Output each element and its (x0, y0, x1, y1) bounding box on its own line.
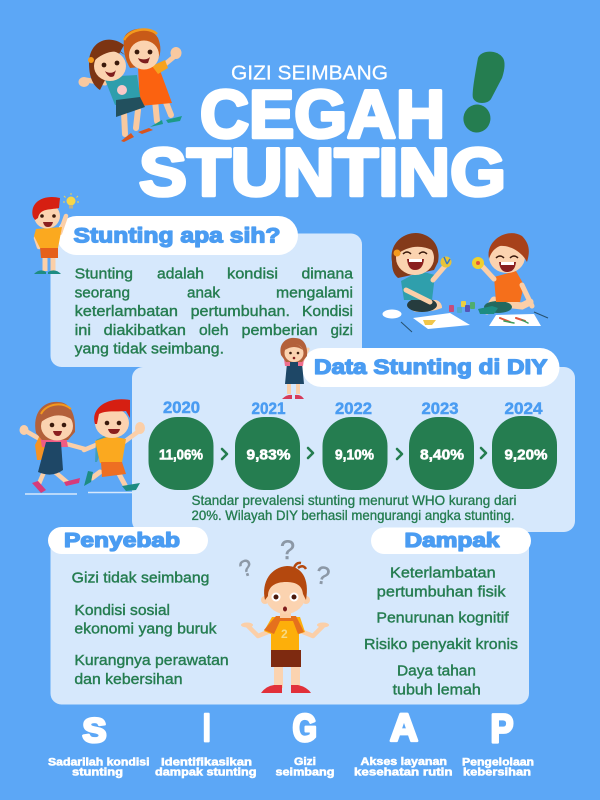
letter P: kebersihan (463, 767, 531, 779)
paragraph: kondisi (227, 266, 278, 283)
letter S (48, 712, 150, 779)
heading: dampak (371, 528, 531, 554)
footnote (192, 492, 516, 523)
letter A: Akses layanan (360, 756, 447, 768)
letter I (155, 707, 256, 779)
year 2024: 2024 (504, 400, 543, 418)
ground shadows (25, 492, 132, 494)
year 2020: 11,06% (159, 446, 203, 463)
illustration: confused boy: ? (236, 554, 256, 582)
letter S: stunting (72, 767, 123, 779)
panel: penyebab and dampak (48, 527, 531, 704)
year 2021 (235, 400, 300, 490)
list: penyebab: Gizi tidak seimbang (72, 570, 209, 586)
chevron (481, 448, 486, 458)
illustration: girl pointing (280, 338, 308, 399)
letter P (462, 707, 534, 779)
title (139, 76, 506, 210)
list: dampak: tubuh lemah (393, 681, 481, 698)
letter I: I (203, 707, 210, 750)
list: dampak: Daya tahan (397, 663, 476, 680)
year 2023: 2023 (422, 400, 458, 418)
girl (20, 402, 85, 493)
letter G: G (292, 707, 317, 750)
paragraph: gizi (331, 322, 353, 339)
palette (382, 310, 402, 318)
heading pill: Stunting apa sih? (74, 224, 280, 248)
letter G: Gizi (294, 756, 316, 768)
letter G (276, 707, 334, 779)
illustration: children painting (382, 233, 548, 332)
paragraph: keterlambatan (75, 303, 178, 320)
illustration: boy with light bulb (32, 193, 79, 274)
icon: exclamation mark (462, 52, 505, 134)
title: CEGAH (200, 76, 445, 152)
year 2022: 9,10% (335, 446, 374, 463)
year 2021: 9,83% (246, 446, 290, 463)
heading pill (57, 216, 298, 255)
heading pill: Data Stunting di DIY (314, 356, 548, 379)
paper right (489, 314, 541, 326)
footnote: 20%. Wilayah DIY berhasil mengurangi angka stunting. (192, 507, 514, 523)
paragraph: ini (75, 322, 91, 339)
list: penyebab (72, 570, 229, 688)
girl (392, 233, 452, 312)
list: penyebab: Kurangnya perawatan (74, 652, 229, 669)
paragraph: mengalami (276, 284, 353, 301)
paint bottles (449, 301, 475, 313)
heading: penyebab: Penyebab (64, 530, 180, 552)
paragraph (75, 266, 354, 358)
illustration: confused boy: ? (314, 561, 332, 591)
illustration: confused boy: ? (280, 535, 295, 565)
letter I: dampak stunting (155, 767, 256, 779)
chevron (397, 449, 402, 459)
year 2023 (409, 400, 474, 490)
letter I: Identifikasikan (161, 757, 252, 769)
list: dampak (364, 565, 518, 698)
paragraph: Kondisi (302, 303, 353, 320)
year 2022: 2022 (335, 400, 372, 418)
list: penyebab: ekonomi yang buruk (74, 620, 217, 638)
chevron (308, 448, 313, 458)
panel: data stunting di DIY (132, 348, 575, 532)
subtitle: GIZI SEIMBANG (231, 62, 388, 84)
panel: stunting apa sih (50, 216, 362, 367)
illustration: confused boy: 2 (281, 627, 288, 641)
list: penyebab: Kondisi sosial (74, 602, 170, 619)
letter A (354, 707, 453, 779)
paragraph: oleh (199, 322, 228, 339)
paragraph: adalah (157, 266, 204, 283)
year 2021: 2021 (252, 400, 286, 418)
paragraph: diakibatkan (104, 322, 186, 339)
footnote: Standar prevalensi stunting menurut WHO kurang dari (192, 492, 516, 508)
heading: penyebab (48, 527, 208, 554)
letter S: S (82, 712, 106, 750)
chevron (222, 449, 227, 459)
list: dampak: Risiko penyakit kronis (364, 636, 518, 653)
letter G: seimbang (276, 767, 334, 779)
paragraph: Stunting (75, 266, 133, 283)
title: STUNTING (139, 134, 506, 210)
year 2020 (148, 399, 214, 490)
heading: dampak: Dampak (404, 530, 501, 552)
paragraph: yang tidak seimbang. (75, 340, 224, 358)
letter A: kesehatan rutin (354, 767, 453, 779)
list: dampak: pertumbuhan fisik (377, 583, 506, 600)
letter S: Sadarilah kondisi (48, 757, 150, 769)
list: dampak: Penurunan kognitif (376, 610, 510, 626)
paragraph: anak (187, 284, 221, 301)
paragraph: dimana (302, 266, 354, 283)
SIGAP acronym (48, 707, 534, 779)
letter P: Pengelolaan (462, 757, 534, 769)
letter A: A (390, 707, 418, 750)
year 2024 (492, 400, 557, 489)
list: penyebab: dan kebersihan (74, 671, 182, 688)
year 2022 (322, 400, 388, 490)
list: dampak: Keterlambatan (390, 565, 496, 582)
year 2024: 9,20% (504, 446, 548, 463)
heading pill (302, 348, 560, 387)
paper left (413, 313, 470, 329)
paragraph: pemberian (242, 322, 318, 339)
year 2020: 2020 (163, 399, 200, 417)
illustration: confused boy (236, 535, 332, 693)
letter P: P (490, 707, 514, 751)
illustration: two girls (78, 29, 182, 142)
paragraph: pertumbuhan. (191, 303, 290, 320)
boy (84, 399, 145, 491)
paragraph: seorang (75, 284, 130, 301)
boy (472, 233, 532, 314)
illustration: children running (20, 399, 145, 494)
year 2023: 8,40% (420, 446, 464, 463)
